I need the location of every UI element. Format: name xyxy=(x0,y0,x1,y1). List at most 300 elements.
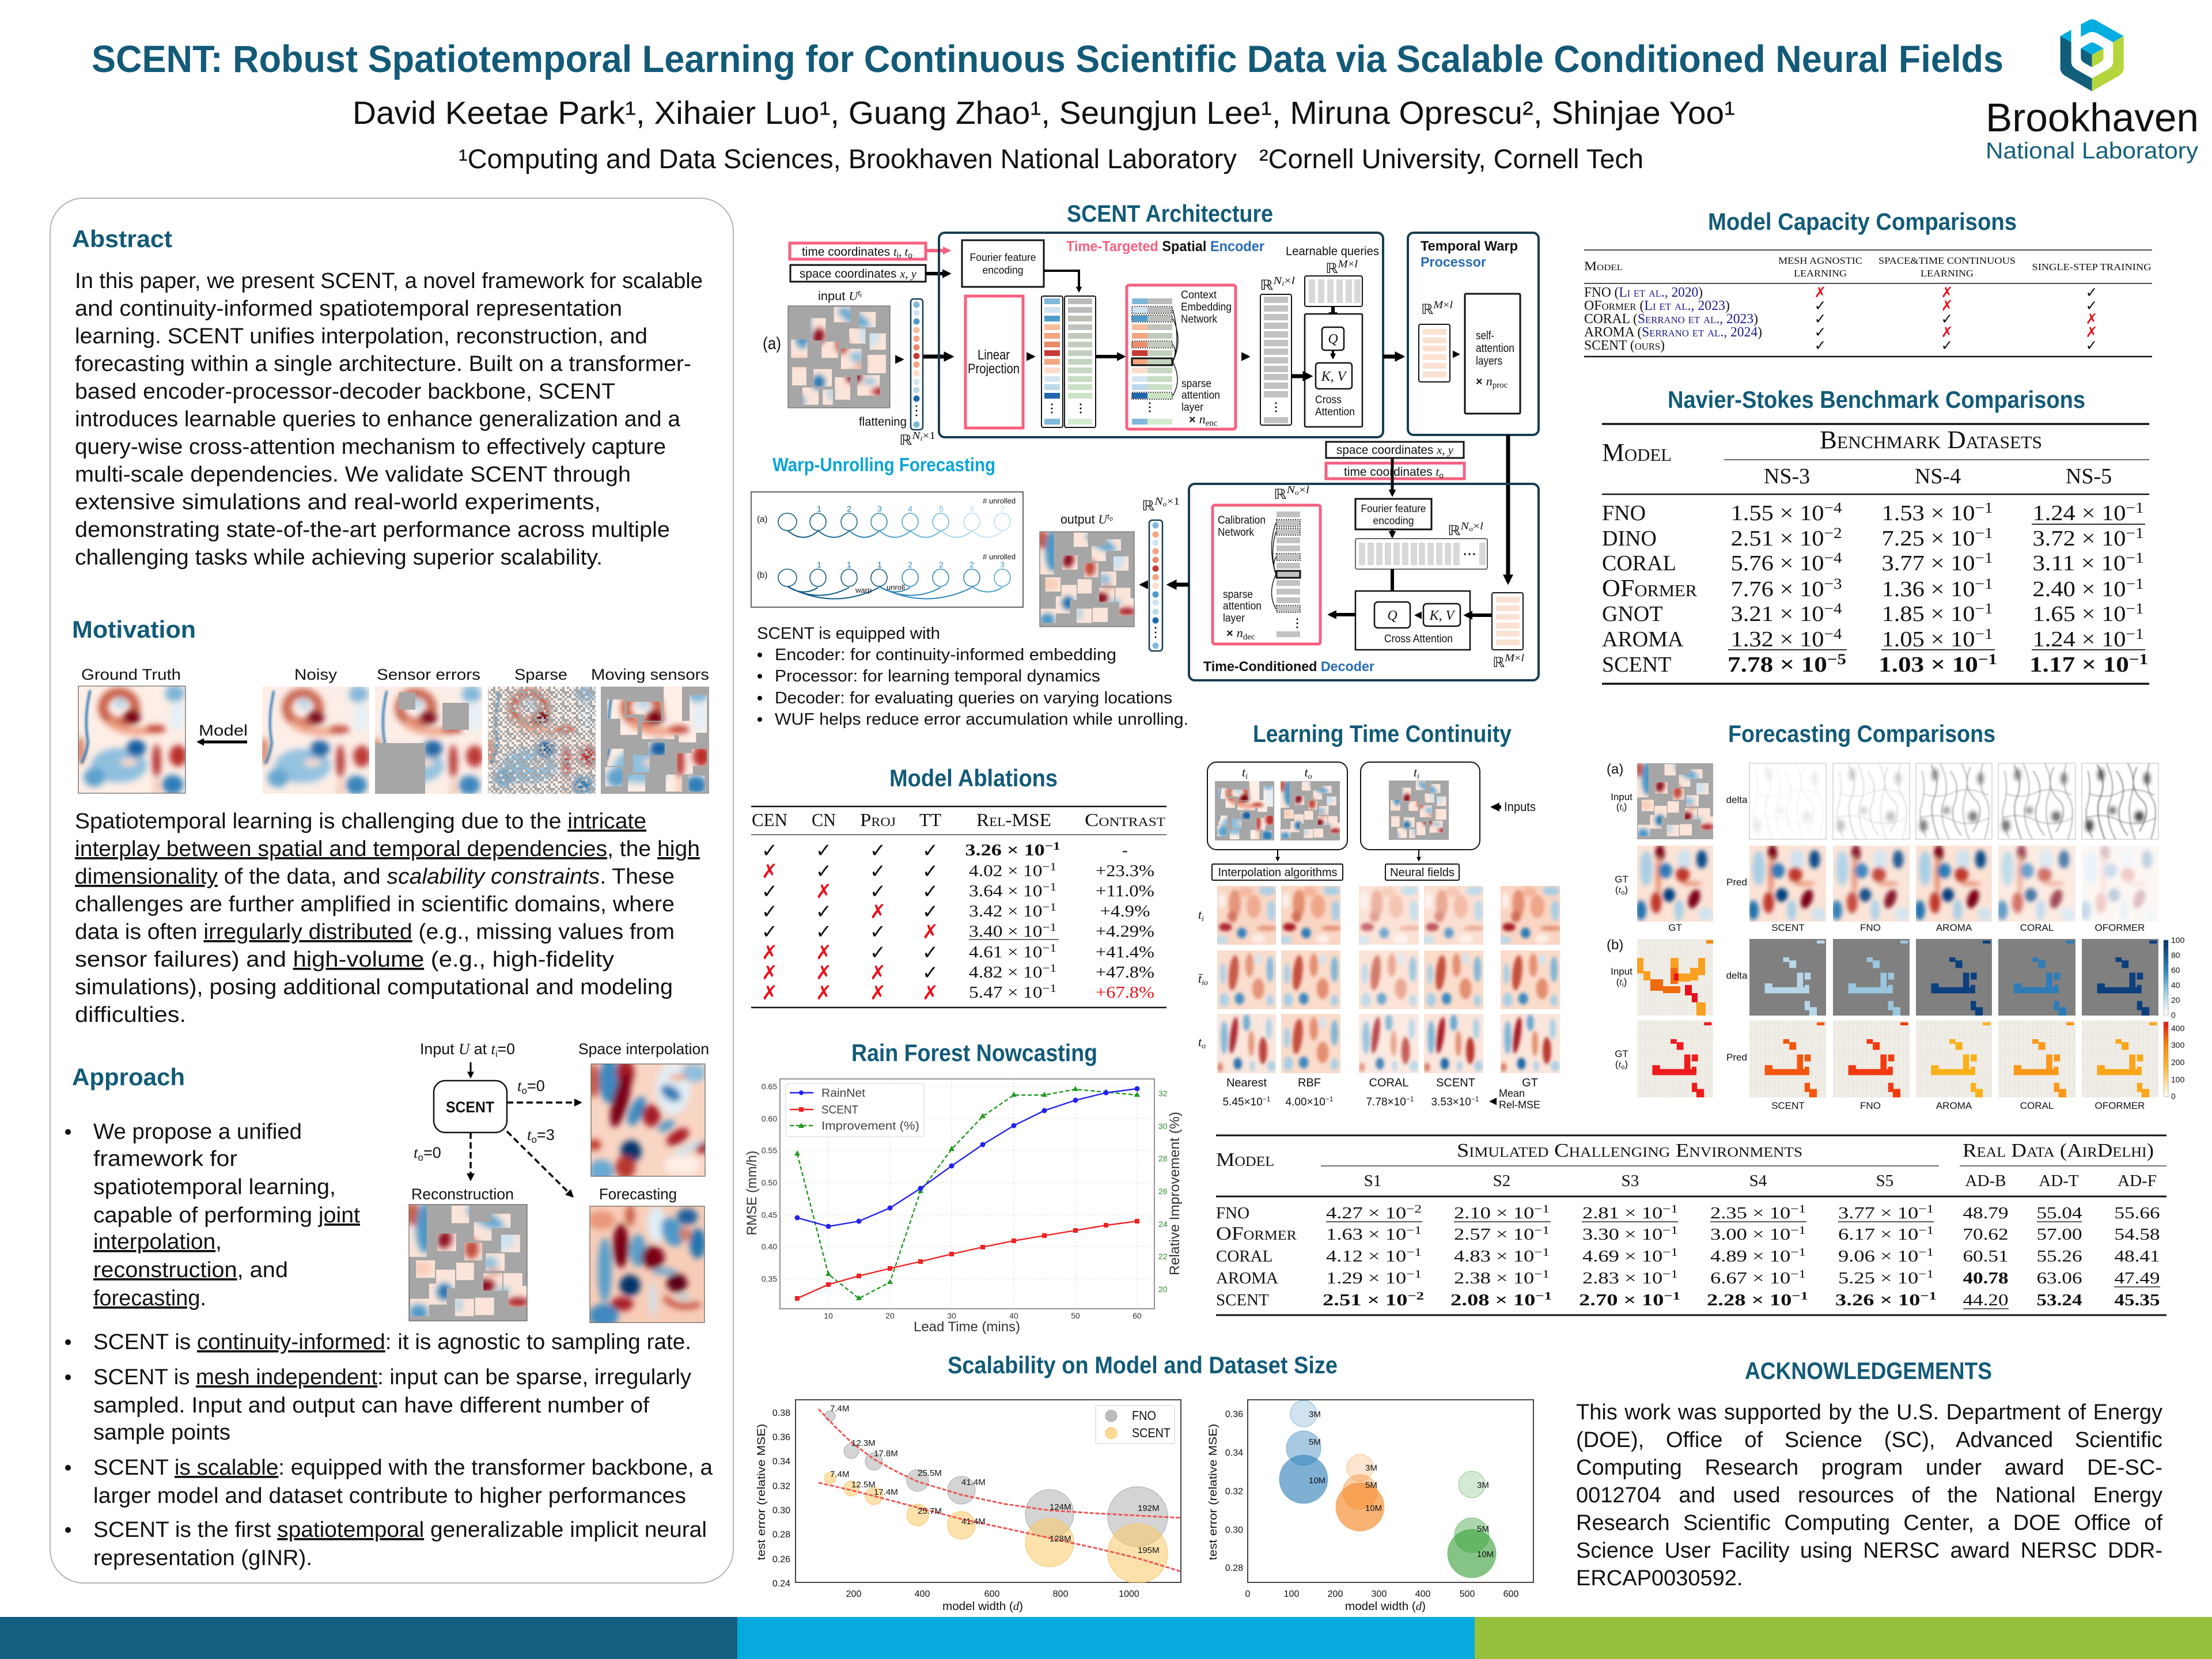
text block: abstract: introduces learnable queries to enhance generalization and a xyxy=(75,407,681,431)
title: SCENT: Robust Spatiotemporal Learning for Continuous Scientific Data via Scalable Conditioned Neural Fields xyxy=(92,37,2003,80)
text block: acknowledgements: Research Scientific Computing Center, a DOE Office of xyxy=(1576,1511,2162,1535)
table: Navier-Stokes: GNOT xyxy=(1602,602,1663,626)
values: mean Rel-MSE xyxy=(1223,1088,1540,1111)
table: model capacity xyxy=(1584,250,2152,357)
x ticks: 1000 xyxy=(1119,1589,1139,1599)
heading: processor blue: Processor xyxy=(1421,255,1486,270)
table: simulated and real environments: −1 xyxy=(1918,1203,1934,1215)
panel (b): (t xyxy=(1616,976,1622,987)
table: model ablations: −1 xyxy=(1042,942,1056,955)
bubble labels xyxy=(830,1404,1160,1555)
box: cross attention: Q xyxy=(1328,332,1338,347)
chart: scalability on dataset size xyxy=(1207,1400,1533,1613)
heading: processor: Temporal Warp xyxy=(1421,238,1518,254)
right ticks: 22 xyxy=(1158,1252,1168,1261)
box: SCENT xyxy=(434,1081,507,1132)
table: Navier-Stokes: −1 xyxy=(1975,499,1993,516)
box: context embedding network: Network xyxy=(1181,313,1217,325)
table: simulated and real environments: −1 xyxy=(1406,1224,1422,1237)
table: simulated and real environments: −1 xyxy=(1791,1290,1808,1302)
box: calibration network: attention xyxy=(1223,600,1262,612)
table: simulated and real environments: −1 xyxy=(1664,1290,1680,1302)
label: R M x l: ×l xyxy=(1514,652,1524,664)
axis label: model width (d) xyxy=(942,1600,1023,1613)
table: Navier-Stokes: 7.78 × 10 xyxy=(1728,653,1811,677)
heading: Scalability on Model and Dataset Size: Scalability on Model and Dataset Size xyxy=(948,1351,1338,1378)
label: R Ni x 1: i xyxy=(921,434,922,442)
table: model ablations: −1 xyxy=(1042,861,1056,873)
axis label: Lead Time: Lead Time (mins) xyxy=(914,1319,1020,1335)
panel (b): CORAL xyxy=(2020,1100,2054,1111)
label: (a): (a) xyxy=(763,334,781,353)
table: simulated and real environments: S1 xyxy=(1364,1172,1381,1190)
table: model ablations: 4.02 × 10 xyxy=(969,862,1033,880)
text block: acknowledgements: Computing Research program under award DE-SC- xyxy=(1576,1456,2162,1480)
bubble labels: 5M xyxy=(1309,1437,1321,1447)
box: calibration network: sparse xyxy=(1223,589,1253,601)
x ticks: 300 xyxy=(1372,1589,1387,1599)
heading: Navier-Stokes Benchmark Comparisons: Navier-Stokes Benchmark Comparisons xyxy=(1668,386,2085,413)
arrow: input to SCENT xyxy=(470,1062,471,1077)
box: self-attention: × n xyxy=(1476,374,1493,388)
bubble labels: 10M xyxy=(1477,1550,1494,1559)
table: simulated and real environments: −1 xyxy=(1662,1224,1678,1237)
values: mean Rel-MSE: 7.78×10 xyxy=(1366,1096,1406,1108)
label: R Ni x 1: N xyxy=(911,430,921,441)
panel (b): FNO xyxy=(1860,1100,1881,1111)
heading: Acknowledgements: ACKNOWLEDGEMENTS xyxy=(1745,1357,1992,1384)
table: Navier-Stokes: 3.77 × 10 xyxy=(1881,551,1965,575)
table: model ablations: - xyxy=(1122,841,1128,859)
panel (b): Input xyxy=(1611,966,1633,977)
label: input U: t xyxy=(858,289,861,298)
box: calibration network: Network xyxy=(1218,527,1254,539)
table: model capacity: ✓ xyxy=(1815,297,1826,314)
colorbar: value: 400 xyxy=(2171,1024,2185,1033)
y ticks: 0.35 xyxy=(762,1274,777,1283)
label: R M x l: M xyxy=(1433,299,1444,310)
heading: Forecasting Comparisons: Forecasting Comparisons xyxy=(1728,720,1995,747)
label: space interpolation: Space interpolation xyxy=(578,1040,709,1058)
heading: Model Capacity Comparisons: Model Capacity Comparisons xyxy=(1708,208,2017,235)
table: simulated and real environments: 70.62 xyxy=(1963,1225,2008,1244)
label: R M x l: ℝ xyxy=(1421,302,1432,317)
y ticks: 0.28 xyxy=(772,1530,790,1540)
colorbar: delta: 100 xyxy=(2171,935,2185,945)
y ticks: 0.38 xyxy=(772,1408,790,1418)
x ticks: 50 xyxy=(1071,1311,1080,1320)
text block: abstract: In this paper, we present SCENT, a novel framework for scalable xyxy=(75,269,703,293)
table: Navier-Stokes: 3.11 × 10 xyxy=(2032,551,2115,575)
box: Fourier encoding decoder: encoding xyxy=(1373,515,1414,527)
axis label: RMSE: RMSE (mm/h) xyxy=(744,1151,760,1235)
box: calibration network: dec xyxy=(1243,632,1255,642)
label: R No x 1: o xyxy=(1162,500,1166,508)
table: simulated and real environments: −1 xyxy=(1535,1290,1552,1302)
table: model ablations: ✗ xyxy=(870,982,886,1005)
y ticks: 0.24 xyxy=(772,1579,790,1589)
panel (b): delta xyxy=(1726,970,1748,981)
legend: RainNet xyxy=(821,1087,865,1100)
image: noisy field xyxy=(260,685,370,802)
values: mean Rel-MSE: 5.45×10 xyxy=(1223,1096,1263,1108)
table: model ablations: Proj xyxy=(860,809,896,830)
label: R Ni x l: × xyxy=(1284,275,1291,286)
box: context embedding network: layer xyxy=(1181,402,1204,414)
row labels: t̄ xyxy=(1198,971,1202,986)
table: Navier-Stokes: −1 xyxy=(2126,499,2144,516)
arrows down xyxy=(1278,850,1419,861)
table: Navier-Stokes: DINO xyxy=(1602,527,1657,551)
bubble labels: 17.8M xyxy=(874,1449,898,1459)
label: t_o=0 left: t xyxy=(414,1144,419,1161)
icon: hexagon mark xyxy=(2061,19,2124,91)
table: model capacity: ✓ xyxy=(1815,337,1826,354)
legend: SCENT xyxy=(1132,1426,1171,1440)
arrow xyxy=(1096,355,1123,358)
table: model ablations: ✗ xyxy=(762,941,778,964)
x ticks: 200 xyxy=(846,1589,861,1599)
table: model ablations: ✗ xyxy=(762,982,778,1005)
y ticks xyxy=(1225,1410,1243,1573)
text block: motivation: sensor failures) and high-volume (e.g., high-fidelity xyxy=(75,948,614,972)
panel (a): FNO xyxy=(1860,922,1881,933)
table: model ablations: 3.64 × 10 xyxy=(969,882,1033,900)
table: simulated and real environments: SCENT xyxy=(1216,1291,1269,1309)
table: Navier-Stokes: −4 xyxy=(1824,550,1842,566)
column labels: RBF xyxy=(1298,1077,1321,1089)
table: Navier-Stokes: −4 xyxy=(1824,499,1842,516)
bubble labels: 17.4M xyxy=(874,1487,898,1497)
logo wordmark: Brookhaven xyxy=(1986,95,2199,140)
text block: abstract: learning. SCENT unifies interpolation, reconstruction, and xyxy=(75,324,647,349)
text block: motivation: interplay between spatial and temporal dependencies , the high xyxy=(75,837,700,861)
table: Navier-Stokes: 2.51 × 10 xyxy=(1730,527,1814,551)
table: Navier-Stokes: −4 xyxy=(1824,626,1842,642)
table: simulated and real environments: 40.78 xyxy=(1963,1269,2008,1287)
diagram: warp-unrolling xyxy=(751,492,1023,607)
table: model ablations: −1 xyxy=(1042,982,1056,995)
bubble labels: 7.4M xyxy=(830,1469,849,1479)
column: encoded tokens xyxy=(1260,294,1291,425)
table: Navier-Stokes: −3 xyxy=(1824,575,1842,592)
box: interpolation inputs: i xyxy=(1245,772,1248,781)
row labels: t xyxy=(1198,907,1202,922)
text block: approach bullets: sample points xyxy=(93,1421,230,1445)
bottom colour band xyxy=(0,1617,2212,1659)
table: Navier-Stokes: 1.05 × 10 xyxy=(1881,627,1965,652)
box: calibration network: × n xyxy=(1226,626,1243,640)
values: mean Rel-MSE: −1 xyxy=(1471,1095,1479,1103)
panel (b): Pred xyxy=(1726,1052,1747,1063)
panel (b): OFORMER xyxy=(2095,1100,2145,1111)
table: simulated and real environments: OFormer xyxy=(1216,1224,1297,1244)
arrow: processor to decoder xyxy=(1506,435,1510,582)
column: value tokens xyxy=(1041,296,1063,427)
table: simulated and real environments: −1 xyxy=(1534,1268,1550,1281)
row labels: io xyxy=(1202,979,1208,987)
row (b): 1 xyxy=(847,560,851,569)
column labels: CORAL xyxy=(1369,1077,1408,1089)
box: space coordinates decoder: space coordinates x, y xyxy=(1336,443,1454,457)
box: linear projection: Projection xyxy=(968,361,1020,377)
y ticks: 0.34 xyxy=(772,1457,790,1467)
label: learnable queries: Learnable queries xyxy=(1286,245,1379,258)
table: model capacity: ✗ xyxy=(1941,324,1953,340)
label: R Ni x l: l xyxy=(1291,275,1295,286)
table: simulated and real environments: AD-T xyxy=(2039,1172,2079,1190)
arrow: to forecasting xyxy=(507,1131,573,1196)
figure: forecasting comparisons xyxy=(1607,762,2185,1111)
panel (b): o xyxy=(1621,1064,1624,1071)
x ticks xyxy=(824,1311,1142,1320)
table: Navier-Stokes: 1.32 × 10 xyxy=(1730,627,1814,652)
bubble labels: 3M xyxy=(1309,1410,1321,1419)
text block: acknowledgements: This work was supported by the U.S. Department of Energy xyxy=(1576,1400,2162,1425)
table: Navier-Stokes: 5.76 × 10 xyxy=(1730,551,1814,575)
table: model capacity: ✓ xyxy=(2086,284,2097,301)
y ticks xyxy=(762,1082,777,1283)
box: interpolation inputs: o xyxy=(1308,772,1312,781)
column labels: Nearest xyxy=(1226,1077,1267,1089)
label: R M x l: ×l xyxy=(1443,299,1452,310)
axis label: model width (d) xyxy=(1345,1600,1426,1613)
table: model ablations: +4.9% xyxy=(1100,902,1150,921)
table: simulated and real environments: AROMA xyxy=(1216,1269,1278,1287)
label: reconstruction: Reconstruction xyxy=(411,1185,514,1203)
x ticks: 10 xyxy=(824,1311,833,1320)
text block: approach bullets: SCENT is mesh independent: input can be sparse, irregularly xyxy=(93,1365,691,1389)
row (a): 5 xyxy=(939,504,944,513)
table: model capacity: CORAL (Serrano et al., 2023) xyxy=(1584,312,1758,327)
table: model capacity: ✓ xyxy=(2086,297,2097,314)
text block: approach bullets: forecasting. xyxy=(93,1286,206,1310)
table: Navier-Stokes: 1.24 × 10 xyxy=(2032,501,2116,525)
panel (b): AROMA xyxy=(1936,1100,1972,1111)
row (b) xyxy=(757,552,1016,599)
row labels: o xyxy=(1202,1042,1206,1051)
text block: abstract: extensive simulations and real-world experiments, xyxy=(75,490,601,514)
label: R Ni x l: i xyxy=(1282,279,1284,287)
label: Sensor errors: Sensor errors xyxy=(377,666,480,683)
label: Sparse: Sparse xyxy=(514,666,567,683)
arrow: to reconstruction xyxy=(469,1132,472,1180)
table: simulated and real environments: Real Data (AirDelhi) xyxy=(1963,1140,2154,1161)
table: simulated and real environments: 6.17 × 10 xyxy=(1838,1225,1902,1244)
table: simulated and real environments: 4.12 × 10 xyxy=(1326,1247,1390,1266)
chart: scalability on model size xyxy=(756,1400,1181,1613)
table: model ablations: −1 xyxy=(1042,921,1056,934)
column: output values xyxy=(1149,520,1162,651)
text block: motivation: dimensionality of the data, and scalability constraints . These xyxy=(75,865,675,889)
y ticks: 0.28 xyxy=(1225,1563,1243,1573)
table: model ablations: ✗ xyxy=(816,941,832,964)
colorbar: delta: 0 xyxy=(2171,1010,2176,1020)
table: Navier-Stokes: −1 xyxy=(2129,651,2148,668)
box: context embedding network: Context xyxy=(1181,289,1217,301)
table: simulated and real environments: S5 xyxy=(1876,1172,1893,1190)
table: simulated and real environments: −2 xyxy=(1407,1290,1424,1302)
row (b): 2 xyxy=(908,560,912,569)
panel (a): OFORMER xyxy=(2095,922,2145,933)
arrow: to encoder xyxy=(923,355,951,358)
text block: approach bullets: SCENT is scalable: equipped with the transformer backbone, a xyxy=(93,1456,713,1480)
table: model ablations: +4.29% xyxy=(1096,922,1154,941)
y ticks: 0.50 xyxy=(762,1178,777,1187)
text block: abstract: forecasting within a single architecture. Built on a transformer- xyxy=(75,352,691,376)
label: t_o=0 left: =0 xyxy=(423,1144,441,1161)
x ticks: 20 xyxy=(885,1311,895,1320)
arrow xyxy=(1243,355,1248,358)
table: model ablations: ✓ xyxy=(816,839,832,862)
table: Navier-Stokes: 2.40 × 10 xyxy=(2032,577,2116,601)
bubble labels: 12.3M xyxy=(851,1438,876,1448)
table: model ablations: −1 xyxy=(1042,901,1056,914)
table: model capacity: ✗ xyxy=(2086,324,2097,340)
table: model ablations: ✓ xyxy=(816,860,832,883)
text block: abstract: demonstrating state-of-the-art performance across multiple xyxy=(75,518,670,542)
table: model capacity: ✓ xyxy=(2086,337,2097,354)
text block: approach bullets: sampled. Input and output can have different number of xyxy=(93,1393,649,1418)
text block: SCENT is equipped with: WUF helps reduce error accumulation while unrolling. xyxy=(775,710,1188,729)
table: Navier-Stokes xyxy=(1602,424,2149,684)
box: self-attention xyxy=(1465,294,1520,414)
table: Navier-Stokes: 1.17 × 10 xyxy=(2029,653,2113,677)
box: calibration network: layer xyxy=(1223,612,1245,624)
text block: acknowledgements: Science User Facility using NERSC award NERSC DDR- xyxy=(1576,1539,2162,1563)
table: Navier-Stokes: −4 xyxy=(1824,600,1842,617)
table: simulated and real environments: 48.79 xyxy=(1963,1204,2008,1222)
panel (a): (a) xyxy=(1607,762,1623,777)
text block: acknowledgements: (DOE), Office of Science (SC), Advanced Scientific xyxy=(1576,1428,2162,1452)
values: mean Rel-MSE: Rel-MSE xyxy=(1499,1099,1540,1111)
row (a): # unrolled xyxy=(983,497,1016,505)
table: simulated and real environments: 2.51 × 10 xyxy=(1323,1291,1387,1309)
bubble labels: 25.5M xyxy=(918,1468,942,1478)
box: cross attention xyxy=(1305,314,1362,427)
table: simulated and real environments: 2.57 × 10 xyxy=(1454,1225,1518,1244)
label: R No x l: N xyxy=(1286,484,1296,495)
text block: motivation: data is often irregularly distributed (e.g., missing values from xyxy=(75,920,675,944)
table: model capacity: SPACE&TIME CONTINUOUS xyxy=(1878,255,2016,266)
affiliations: ¹Computing and Data Sciences, Brookhaven National Laboratory ²Cornell University, Cornell Tech xyxy=(459,143,1643,174)
table: Navier-Stokes: 3.21 × 10 xyxy=(1730,602,1814,626)
text block: abstract: multi-scale dependencies. We validate SCENT through xyxy=(75,463,631,487)
label: output U: o xyxy=(1109,516,1113,522)
colorbar: value: 0 xyxy=(2171,1092,2176,1101)
panel: temporal warp processor xyxy=(1408,233,1539,435)
table: model ablations: CEN xyxy=(752,809,787,830)
table: model capacity: ✓ xyxy=(1941,310,1953,327)
table: model ablations: 4.82 × 10 xyxy=(969,963,1033,982)
table: simulated and real environments: −1 xyxy=(1790,1203,1806,1215)
panel (b): SCENT xyxy=(1771,1100,1805,1111)
text block: approach bullets: interpolation, xyxy=(93,1230,222,1254)
arrow xyxy=(1291,374,1310,378)
panel (a): o xyxy=(1621,889,1624,896)
arrow xyxy=(1331,306,1335,319)
table: Navier-Stokes: AROMA xyxy=(1602,627,1684,652)
text block: approach bullets: framework for xyxy=(93,1147,237,1171)
table: simulated and real environments: AD-B xyxy=(1965,1172,2006,1190)
table: simulated and real environments: −1 xyxy=(1406,1268,1422,1281)
table: simulated and real environments: 3.77 × 10 xyxy=(1838,1204,1902,1222)
label: R No x l: ℝ xyxy=(1274,487,1285,502)
table: simulated and real environments: 4.69 × 10 xyxy=(1582,1247,1646,1266)
table: simulated and real environments: −2 xyxy=(1406,1203,1422,1215)
y ticks: 0.45 xyxy=(762,1210,777,1219)
text block: approach bullets: representation (gINR). xyxy=(93,1546,312,1570)
table: model capacity: ✓ xyxy=(1815,310,1826,327)
box: time coordinates input: time coordinates t xyxy=(802,245,897,259)
colorbar: value xyxy=(2164,1022,2185,1101)
y ticks: 0.30 xyxy=(1225,1525,1243,1535)
box: context embedding network: attention xyxy=(1181,389,1220,402)
table: simulated and real environments: 6.67 × 10 xyxy=(1710,1269,1774,1287)
table: model ablations: ✓ xyxy=(922,941,938,964)
table: Navier-Stokes: NS-3 xyxy=(1764,464,1810,488)
label: input: i xyxy=(495,1050,497,1059)
maps: delta xyxy=(1749,939,2158,1016)
table: simulated and real environments: 2.35 × 10 xyxy=(1710,1204,1774,1222)
colorbar: delta: 40 xyxy=(2171,980,2180,990)
table: model capacity: MESH AGNOSTIC xyxy=(1778,255,1862,266)
heading: encoder: Time-Targeted Spatial Encoder xyxy=(1066,238,1264,255)
text block: SCENT is equipped with: SCENT is equipped with xyxy=(757,624,940,643)
values: mean Rel-MSE: −1 xyxy=(1263,1095,1271,1103)
table: simulated and real environments: −1 xyxy=(1790,1268,1806,1281)
arrow xyxy=(1466,613,1491,617)
table: simulated and real environments: 1.63 × 10 xyxy=(1326,1225,1390,1244)
table: model capacity: FNO (Li et al., 2020) xyxy=(1584,285,1703,300)
x ticks: 100 xyxy=(1284,1589,1299,1599)
heading: Approach: Approach xyxy=(72,1063,185,1090)
table: simulated and real environments: −1 xyxy=(1790,1224,1806,1237)
table: Navier-Stokes: −5 xyxy=(1827,651,1846,668)
x ticks: 30 xyxy=(947,1311,956,1320)
arrow xyxy=(1391,569,1394,597)
row labels: i xyxy=(1202,915,1204,923)
colorbar: value: 200 xyxy=(2171,1058,2185,1067)
colorbar: delta xyxy=(2164,935,2185,1020)
table: simulated and real environments: 2.81 × 10 xyxy=(1582,1204,1646,1222)
right ticks: 28 xyxy=(1158,1154,1168,1163)
box: linear projection xyxy=(965,296,1023,428)
table: simulated and real environments: −1 xyxy=(1534,1224,1550,1237)
heading: Learning Time Continuity: Learning Time Continuity xyxy=(1253,720,1512,747)
table: simulated and real environments: −1 xyxy=(1918,1246,1934,1259)
x ticks: 40 xyxy=(1009,1311,1018,1320)
row (b): warp xyxy=(855,586,872,594)
panel (a): SCENT xyxy=(1771,922,1805,933)
table: model capacity: ✗ xyxy=(1941,297,1953,314)
label: R Ni x l: N xyxy=(1272,275,1282,286)
label: output U: t xyxy=(1107,512,1110,521)
legend: FNO xyxy=(1132,1408,1156,1423)
table: simulated and real environments: 53.24 xyxy=(2037,1291,2082,1309)
table: model ablations: ✗ xyxy=(870,961,886,984)
text block: abstract xyxy=(75,269,703,570)
box: decoder cross attention: Q xyxy=(1387,608,1397,623)
box: context embedding network: enc xyxy=(1206,419,1218,428)
table: simulated and real environments: −1 xyxy=(1534,1246,1550,1259)
table: Navier-Stokes: 1.03 × 10 xyxy=(1878,653,1962,677)
diagram: SCENT unified tasks xyxy=(406,1040,709,1327)
table: model capacity: Model xyxy=(1584,259,1623,273)
panel (a): delta xyxy=(1726,794,1748,805)
row (b): 2 xyxy=(969,560,974,569)
bubble labels: 7.4M xyxy=(830,1404,849,1414)
